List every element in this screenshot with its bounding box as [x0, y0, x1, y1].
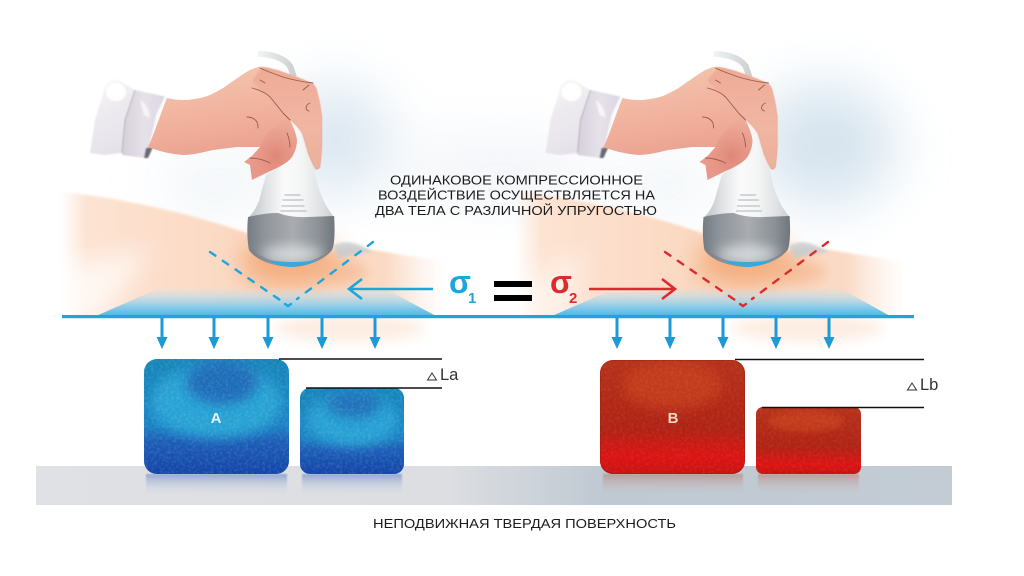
delta La label — [428, 366, 459, 384]
sigma 1 label: σ — [449, 264, 471, 300]
block B: B — [668, 410, 679, 427]
compressed block A — [300, 388, 404, 474]
left force arrows — [156, 318, 380, 349]
delta La label: La — [440, 366, 459, 384]
rigid surface band — [36, 466, 952, 505]
blue stress arrow — [349, 279, 433, 299]
background haze behind hands — [160, 85, 895, 205]
main compression plate line — [62, 315, 914, 318]
description text: ВОЗДЕЙСТВИЕ ОСУЩЕСТВЛЯЕТСЯ НА — [378, 188, 655, 202]
right hand with probe — [546, 54, 792, 270]
red stress arrow — [589, 279, 675, 299]
right force arrows — [612, 318, 834, 349]
compressed block B — [756, 407, 861, 474]
delta Lb measurement lines — [735, 360, 924, 408]
description text: ДВА ТЕЛА С РАЗЛИЧНОЙ УПРУГОСТЬЮ — [375, 203, 657, 218]
right dashed compression V — [665, 242, 828, 306]
right skin body — [500, 192, 905, 342]
block A: A — [211, 410, 222, 427]
description text: ОДИНАКОВОЕ КОМПРЕССИОННОЕ — [390, 172, 643, 188]
delta Lb label: Lb — [920, 376, 938, 394]
block B — [600, 360, 745, 474]
left skin body — [30, 192, 445, 342]
left dashed compression V — [210, 242, 373, 306]
left compression pad — [96, 287, 436, 316]
left hand with probe — [90, 54, 337, 270]
sigma 1 label — [449, 264, 476, 307]
sigma 2 label: 2 — [569, 290, 577, 307]
surface caption: НЕПОДВИЖНАЯ ТВЕРДАЯ ПОВЕРХНОСТЬ — [373, 516, 676, 531]
block A — [144, 359, 289, 474]
description text — [375, 172, 657, 218]
delta Lb label — [908, 376, 938, 394]
sigma 2 label: σ — [550, 264, 572, 300]
reflections of blocks — [146, 474, 859, 496]
right compression pad — [552, 287, 890, 316]
sigma 2 label — [550, 264, 577, 307]
equals sign — [494, 281, 532, 301]
sigma 1 label: 1 — [468, 290, 476, 307]
delta La measurement lines — [279, 359, 442, 388]
